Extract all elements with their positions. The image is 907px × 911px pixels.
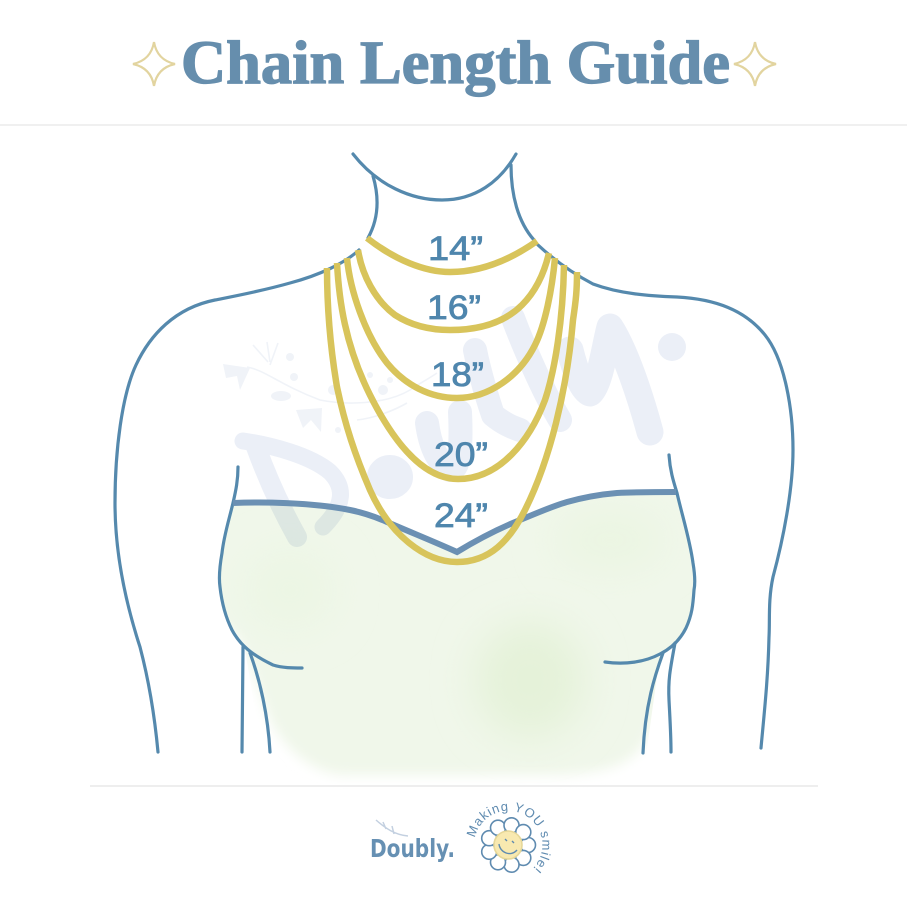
label 20 inch: 20” <box>434 436 488 474</box>
letter D <box>243 441 340 527</box>
label 24 inch: 24” <box>434 497 488 535</box>
right bust <box>605 455 695 663</box>
icon: smiling flower <box>482 818 536 872</box>
logo wordmark: Doubly. <box>370 834 455 863</box>
letter l <box>513 318 560 420</box>
chain 16 inch <box>358 250 549 330</box>
chain 20 inch <box>337 263 564 479</box>
watermark: Doubly <box>243 318 686 537</box>
left neck <box>368 176 377 238</box>
label 16 inch: 16” <box>427 289 481 327</box>
badge text: Making YOU smile! <box>466 802 551 874</box>
chain 24 inch <box>327 268 577 562</box>
right shoulder and arm <box>538 245 793 748</box>
chain 14 inch <box>367 238 537 272</box>
right inner arm lines <box>643 643 675 753</box>
logo sprig <box>376 820 408 836</box>
label 18 inch: 18” <box>431 356 484 394</box>
length labels <box>427 230 488 535</box>
right neck <box>511 165 534 240</box>
letter b <box>475 350 520 430</box>
neckline <box>233 492 676 552</box>
letter o <box>372 460 408 494</box>
heading text: Chain Length Guide <box>181 30 730 97</box>
left inner arm lines <box>242 647 270 752</box>
collar curve <box>353 154 516 200</box>
watermark: branch <box>223 342 437 433</box>
footer logo: Doubly <box>370 820 455 863</box>
dot <box>658 333 686 361</box>
letter y <box>570 327 650 432</box>
label 14 inch: 14” <box>428 230 483 268</box>
green dress wash <box>221 495 693 777</box>
chains <box>327 238 577 562</box>
icon: left sparkle <box>133 42 175 86</box>
icon: right sparkle <box>734 42 776 86</box>
chain 18 inch <box>347 258 555 398</box>
left bust <box>219 467 302 668</box>
title <box>133 30 776 97</box>
footer badge: Making YOU smile <box>466 802 551 874</box>
neck and body outline <box>115 154 793 753</box>
left shoulder and arm <box>115 250 359 752</box>
letter u <box>427 412 461 470</box>
